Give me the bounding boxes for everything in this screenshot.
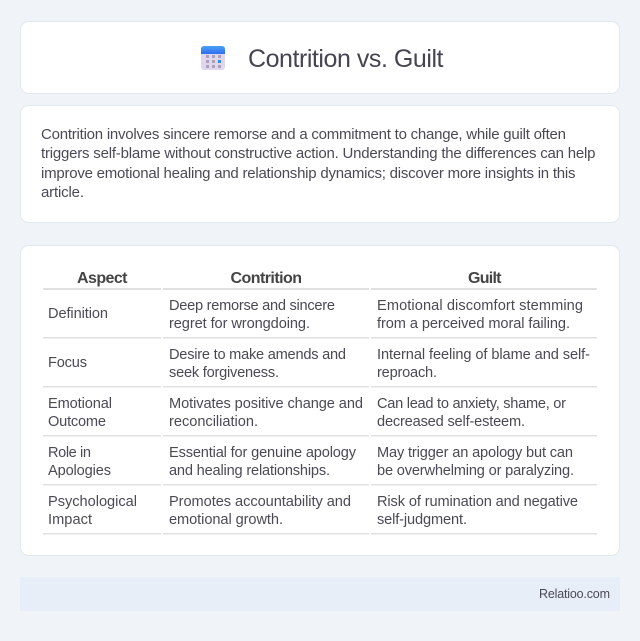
table row: Emotional Outcome	[43, 396, 597, 436]
table row: Role in Apologies: be overwhelming or paralyzing.	[377, 463, 574, 479]
table row: Role in Apologies: Role in	[48, 445, 91, 461]
table row: Psychological Impact	[43, 494, 597, 534]
table row: Emotional Outcome: Can lead to anxiety, shame, or	[377, 396, 566, 412]
table header: Guilt	[468, 270, 502, 287]
table row: Role in Apologies: Apologies	[48, 463, 111, 479]
text block: intro paragraph	[41, 126, 596, 201]
table row: Emotional Outcome: Outcome	[48, 414, 106, 430]
table row: Focus: Internal feeling of blame and self-	[377, 347, 590, 363]
table header: Contrition	[230, 270, 302, 287]
table row: Emotional Outcome: Motivates positive change and	[169, 396, 363, 412]
table row: Psychological Impact: Promotes accountability and	[169, 494, 351, 510]
table row: Emotional Outcome: Emotional	[48, 396, 112, 412]
table row: Emotional Outcome: decreased self-esteem.	[377, 414, 525, 430]
panel: intro	[20, 106, 620, 222]
table row: Focus: Focus	[48, 355, 87, 371]
text block: intro paragraph: improve emotional healing and relationship dynamics; discover more insights in this	[41, 165, 576, 182]
table row: Definition: regret for wrongdoing.	[169, 316, 310, 332]
table row: Definition: from a perceived moral failing.	[377, 316, 570, 332]
title: Contrition vs. Guilt	[248, 45, 444, 73]
panel: comparison table	[20, 246, 620, 556]
table row: Definition	[43, 298, 597, 338]
table row: Psychological Impact: self-judgment.	[377, 512, 467, 528]
table row: Focus	[43, 347, 597, 388]
table header	[43, 270, 597, 290]
table row: Psychological Impact: emotional growth.	[169, 512, 283, 528]
table row: Role in Apologies: Essential for genuine apology	[169, 445, 357, 461]
table header: Aspect	[77, 270, 128, 287]
panel: title header	[20, 22, 620, 94]
table row: Psychological Impact: Risk of rumination and negative	[377, 494, 578, 510]
icon: calendar	[201, 46, 225, 70]
text block: intro paragraph: triggers self-blame without constructive action. Understanding the differences can help	[41, 145, 596, 162]
text block: intro paragraph: Contrition involves sincere remorse and a commitment to change, while guilt often	[41, 126, 566, 143]
table row: Definition: Deep remorse and sincere	[169, 298, 335, 314]
table row: Psychological Impact: Impact	[48, 512, 92, 528]
table row: Definition: Emotional discomfort stemming	[377, 298, 583, 314]
table row: Role in Apologies: and healing relationships.	[169, 463, 330, 479]
table row: Definition: Definition	[48, 306, 108, 322]
table row: Focus: reproach.	[377, 365, 437, 381]
table row: Focus: seek forgiveness.	[169, 365, 279, 381]
footer text: Relatioo.com	[539, 587, 610, 601]
table row: Role in Apologies: May trigger an apology but can	[377, 445, 573, 461]
text block: intro paragraph: article.	[41, 184, 84, 201]
table row: Psychological Impact: Psychological	[48, 494, 137, 510]
table row: Role in Apologies	[43, 445, 597, 486]
footer bar	[20, 577, 620, 611]
table row: Emotional Outcome: reconciliation.	[169, 414, 258, 430]
table row: Focus: Desire to make amends and	[169, 347, 346, 363]
